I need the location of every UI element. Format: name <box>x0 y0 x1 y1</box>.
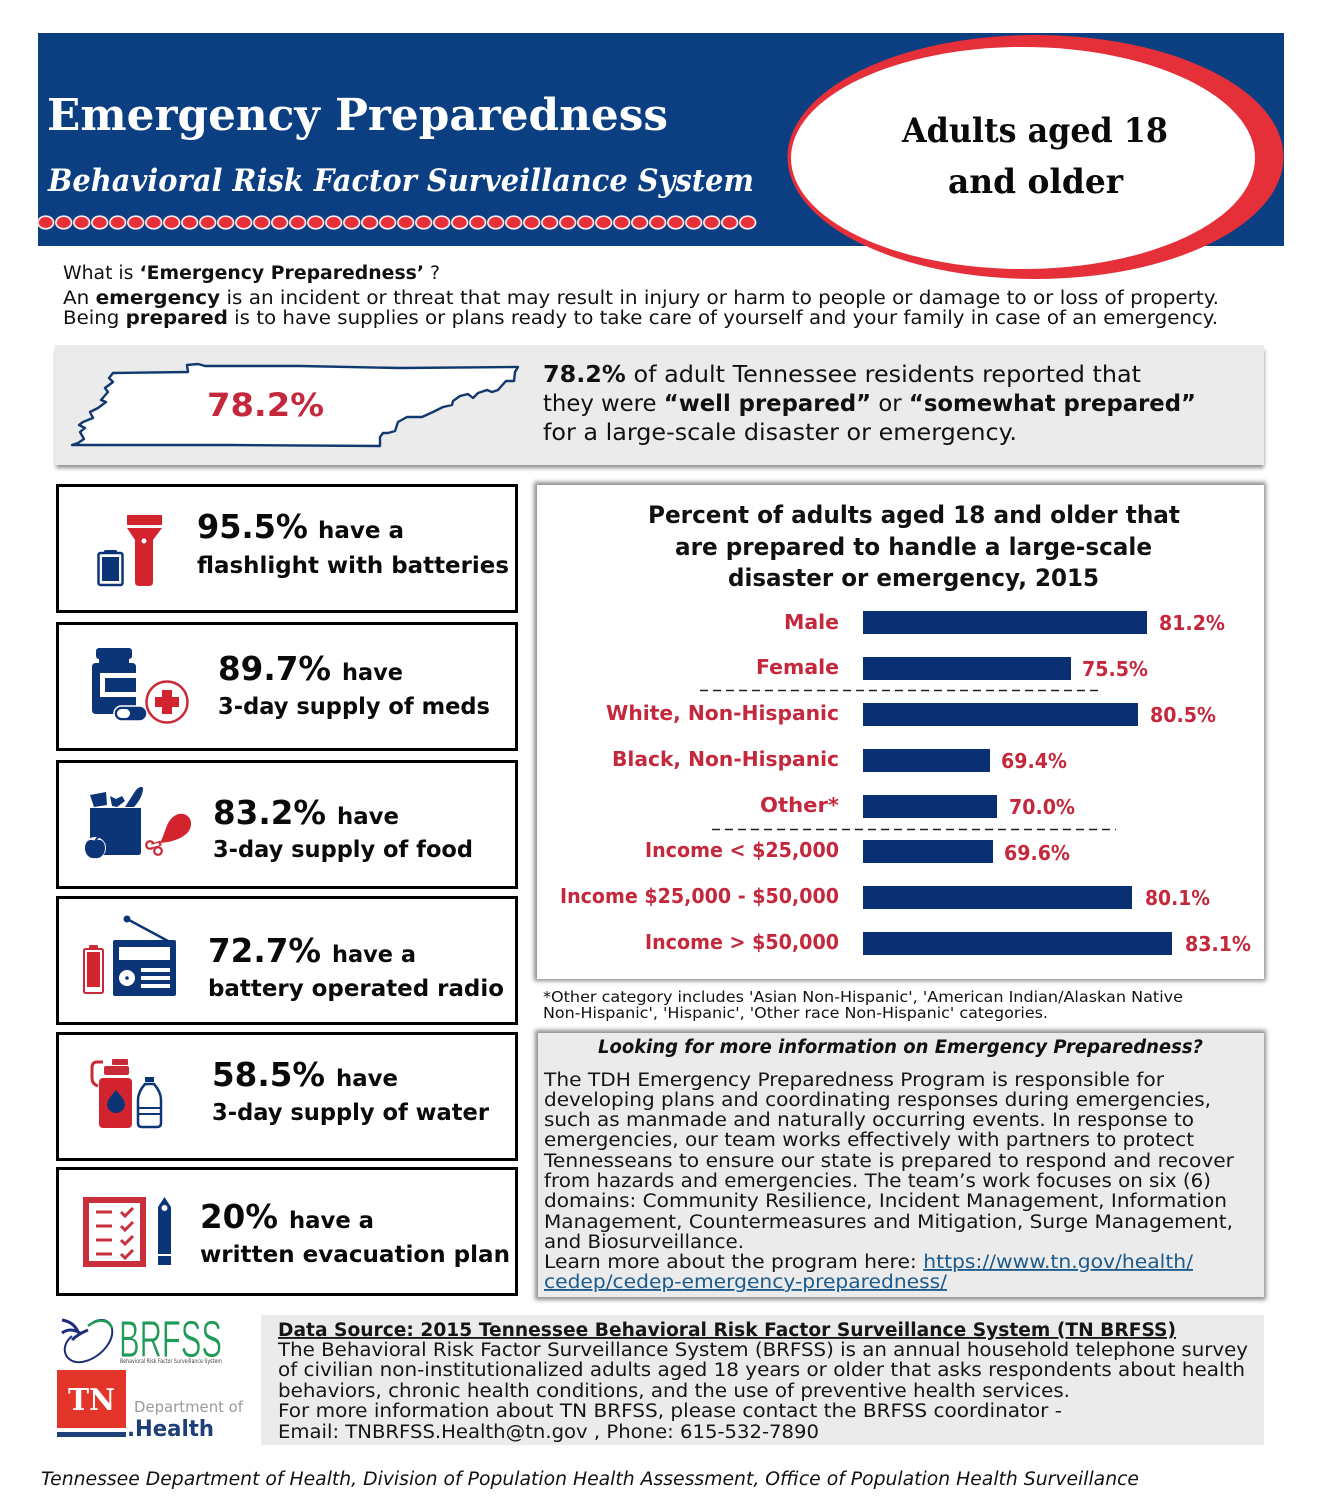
logo: TN Department of Health: Department of <box>134 1398 244 1416</box>
panel: data source: behaviors, chronic health conditions, and the use of preventive health services. <box>278 1381 1070 1402</box>
chart footnote <box>543 988 1183 1022</box>
panel: 78.2 percent prepared <box>55 345 1264 468</box>
panel: data source: Data Source: 2015 Tennessee Behavioral Risk Factor Surveillance System (TN BRFSS) <box>278 1320 1176 1341</box>
panel: food stat <box>58 762 516 888</box>
info heading: Looking for more information on Emergency Preparedness? <box>598 1037 1203 1058</box>
stat text: 95.5% <box>197 507 308 546</box>
icon: grocery bag and chicken leg <box>84 787 191 859</box>
chart title <box>648 501 1180 592</box>
stat text <box>200 1197 510 1268</box>
category labels: Female <box>756 655 839 679</box>
panel: data source: The Behavioral Risk Factor Surveillance System (BRFSS) is an annual household telephone survey <box>277 1340 1248 1361</box>
category labels: White, Non-Hispanic <box>606 701 839 725</box>
statewide statement: for a large-scale disaster or emergency. <box>543 418 1017 446</box>
icon: water bottles <box>92 1059 161 1128</box>
bar values: 81.2% <box>1159 611 1225 635</box>
panel: data source: For more information about TN BRFSS, please contact the BRFSS coordinator - <box>278 1401 1062 1422</box>
panel: flashlight stat <box>58 486 516 612</box>
chart title: Percent of adults aged 18 and older that <box>648 501 1180 529</box>
stat text: battery operated radio <box>208 976 504 1002</box>
info body: Management, Countermeasures and Mitigation, Surge Management, <box>544 1212 1233 1233</box>
bar values: 69.6% <box>1004 841 1070 865</box>
stat text: written evacuation plan <box>200 1242 510 1268</box>
bar values: 69.4% <box>1001 749 1067 773</box>
logo: TN Department of Health: .Health <box>127 1417 214 1442</box>
icon: checklist and pen <box>86 1197 171 1265</box>
info body: domains: Community Resilience, Incident Management, Information <box>544 1191 1227 1212</box>
chart footnote: *Other category includes 'Asian Non-Hispanic', 'American Indian/Alaskan Native <box>543 988 1183 1006</box>
audience oval <box>788 35 1284 279</box>
stat text: 72.7% <box>208 931 321 970</box>
icon: flashlight and battery <box>98 515 162 586</box>
stat text: 3-day supply of food <box>213 837 473 863</box>
stat text: have a <box>289 1208 374 1234</box>
stat text <box>213 793 473 863</box>
chart footnote: Non-Hispanic', 'Hispanic', 'Other race Non-Hispanic' categories. <box>543 1004 1048 1022</box>
info body: The TDH Emergency Preparedness Program is responsible for <box>543 1070 1164 1091</box>
audience oval: Adults aged 18 <box>901 111 1168 151</box>
category labels: Male <box>784 610 839 634</box>
info body: Tennesseans to ensure our state is prepared to respond and recover <box>543 1151 1234 1172</box>
definition text <box>63 263 1219 329</box>
category labels: Other* <box>760 793 840 817</box>
bar values: 80.1% <box>1145 886 1210 910</box>
stat text: 20% <box>200 1197 278 1236</box>
statewide statement: 78.2% of adult Tennessee residents reported that <box>543 360 1141 388</box>
panel: bar chart <box>534 482 1266 981</box>
header banner <box>37 33 1284 279</box>
statewide statement <box>543 360 1196 446</box>
logo: BRFSS <box>62 1311 222 1369</box>
bar values: 83.1% <box>1185 932 1251 956</box>
audience oval: and older <box>948 162 1124 202</box>
logo: TN Department of Health <box>57 1370 244 1442</box>
icon: radio and battery <box>84 916 176 996</box>
info body: from hazards and emergencies. The team’s work focuses on six (6) <box>544 1171 1211 1192</box>
stat text: have <box>342 660 403 686</box>
stat text: 3-day supply of water <box>212 1100 490 1126</box>
stat text: have <box>337 804 399 830</box>
info body: Learn more about the program here: https://www.tn.gov/health/ <box>544 1252 1194 1273</box>
stat text <box>212 1055 490 1126</box>
info body: developing plans and coordinating responses during emergencies, <box>544 1090 1211 1111</box>
info body: emergencies, our team works effectively with partners to protect <box>544 1130 1194 1151</box>
logo: BRFSS: BRFSS <box>119 1311 222 1369</box>
footer credit: Tennessee Department of Health, Division of Population Health Assessment, Office of Population Health Surveillance <box>41 1469 1139 1490</box>
category labels: Income > $50,000 <box>645 930 839 954</box>
info body: cedep/cedep-emergency-preparedness/ <box>544 1272 948 1293</box>
panel: data source: Email: TNBRFSS.Health@tn.gov , Phone: 615-532-7890 <box>278 1422 819 1443</box>
stat text: flashlight with batteries <box>197 553 509 579</box>
stat text <box>197 507 509 579</box>
stat text: 83.2% <box>213 793 326 832</box>
category labels: Income $25,000 - $50,000 <box>560 884 839 908</box>
stat text: 58.5% <box>212 1055 325 1094</box>
bar values: 75.5% <box>1082 657 1148 681</box>
icon: medication bottle <box>92 648 188 722</box>
category labels: Income < $25,000 <box>645 838 839 862</box>
title: Emergency Preparedness <box>47 90 668 141</box>
Tennessee outline map <box>72 364 518 446</box>
statewide statement: they were “well prepared” or “somewhat prepared” <box>543 389 1196 417</box>
chart title: disaster or emergency, 2015 <box>728 564 1099 592</box>
stat text: 3-day supply of meds <box>218 694 490 720</box>
panel: data source: of civilian non-institutionalized adults aged 18 years or older that asks respondents about health <box>278 1360 1245 1381</box>
bar values: 70.0% <box>1009 795 1075 819</box>
info body <box>543 1070 1234 1293</box>
stat text: have <box>336 1066 398 1092</box>
definition text: Being prepared is to have supplies or plans ready to take care of yourself and your family in case of an emergency. <box>63 308 1218 329</box>
bar values: 80.5% <box>1150 703 1216 727</box>
chart title: are prepared to handle a large-scale <box>675 533 1152 561</box>
logo: BRFSS: Behavioral Risk Factor Surveillance System <box>120 1358 222 1365</box>
panel: medication stat <box>58 624 516 750</box>
stat text <box>208 931 504 1002</box>
stat text: have a <box>318 518 404 544</box>
panel: data source <box>261 1315 1264 1445</box>
info body: such as manmade and naturally occurring events. In response to <box>544 1110 1194 1131</box>
subtitle: Behavioral Risk Factor Surveillance System <box>47 163 754 199</box>
category labels <box>560 610 840 954</box>
definition text: An emergency is an incident or threat that may result in injury or harm to people or damage to or loss of property. <box>63 288 1219 309</box>
category labels: Black, Non-Hispanic <box>612 747 839 771</box>
definition text: What is ‘Emergency Preparedness’ ? <box>63 263 440 284</box>
bar values <box>1001 611 1251 956</box>
map value: 78.2% <box>207 386 324 424</box>
stat text: 89.7% <box>218 649 331 688</box>
bars <box>863 611 1172 955</box>
panel: more information <box>535 1030 1266 1300</box>
panel: evacuation plan stat <box>58 1168 516 1294</box>
panel: water stat <box>58 1034 516 1160</box>
stat text <box>218 649 490 720</box>
logo: TN Department of Health: TN <box>68 1383 115 1418</box>
info body: and Biosurveillance. <box>544 1232 744 1253</box>
stat text: have a <box>332 942 416 968</box>
dotted divider <box>37 212 757 232</box>
panel: radio stat <box>58 898 516 1024</box>
